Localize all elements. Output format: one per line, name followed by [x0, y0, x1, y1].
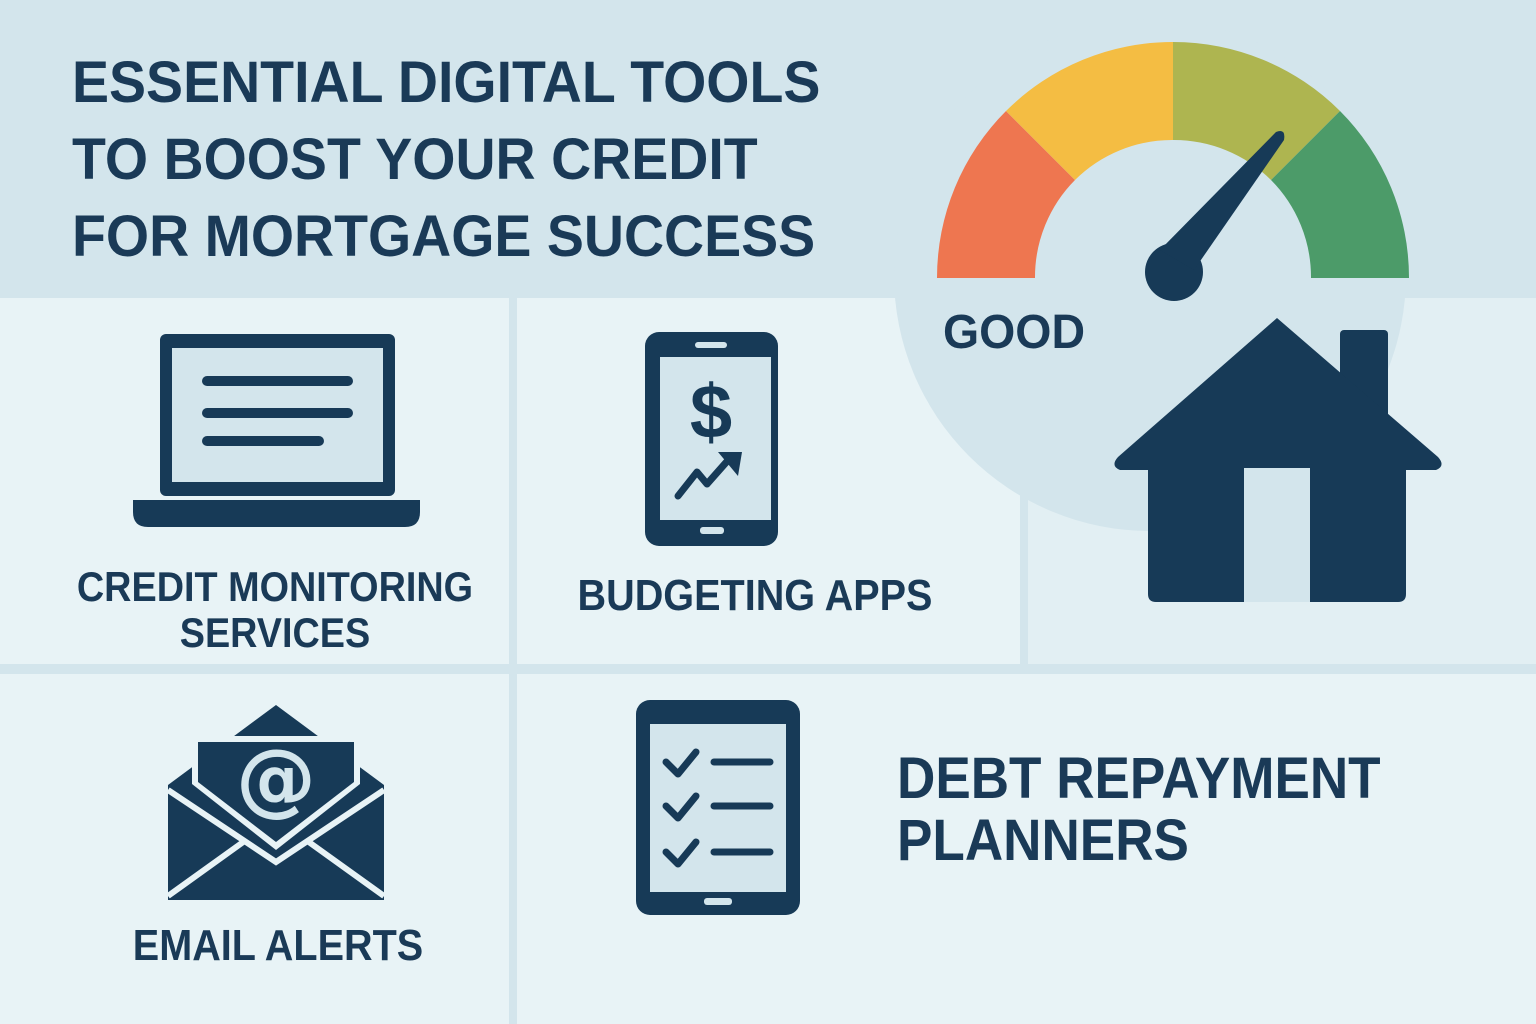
label: budgeting apps: BUDGETING APPS: [578, 571, 932, 620]
icon: house: [1114, 318, 1442, 602]
icon: laptop: [133, 334, 420, 527]
icon: phone: [645, 332, 778, 546]
panel: house: [1028, 298, 1536, 664]
panel: debt: [517, 674, 1536, 1024]
icon: envelope: [168, 705, 384, 900]
panel: email: [0, 674, 509, 1024]
title: ESSENTIAL DIGITAL TOOLS: [72, 50, 820, 115]
label: debt repayment planners: [897, 746, 1381, 873]
title: [72, 50, 820, 269]
icon: phone: $: [690, 370, 732, 455]
title: FOR MORTGAGE SUCCESS: [72, 204, 815, 269]
label: credit monitoring: SERVICES: [180, 609, 370, 656]
needle: [1145, 131, 1284, 301]
label: credit monitoring: CREDIT MONITORING: [77, 563, 473, 610]
panel: budgeting: [517, 298, 1020, 664]
icon: tablet checklist: [636, 700, 800, 915]
gauge label: GOOD: [943, 306, 1085, 359]
label: credit monitoring: [77, 563, 473, 656]
label: email alerts: EMAIL ALERTS: [133, 921, 423, 970]
icon: envelope: @: [236, 732, 316, 825]
gauge: [937, 42, 1409, 301]
label: debt repayment planners: PLANNERS: [897, 808, 1189, 873]
title: TO BOOST YOUR CREDIT: [72, 127, 758, 192]
panel: credit monitoring: [0, 298, 509, 664]
label: debt repayment planners: DEBT REPAYMENT: [897, 746, 1381, 811]
